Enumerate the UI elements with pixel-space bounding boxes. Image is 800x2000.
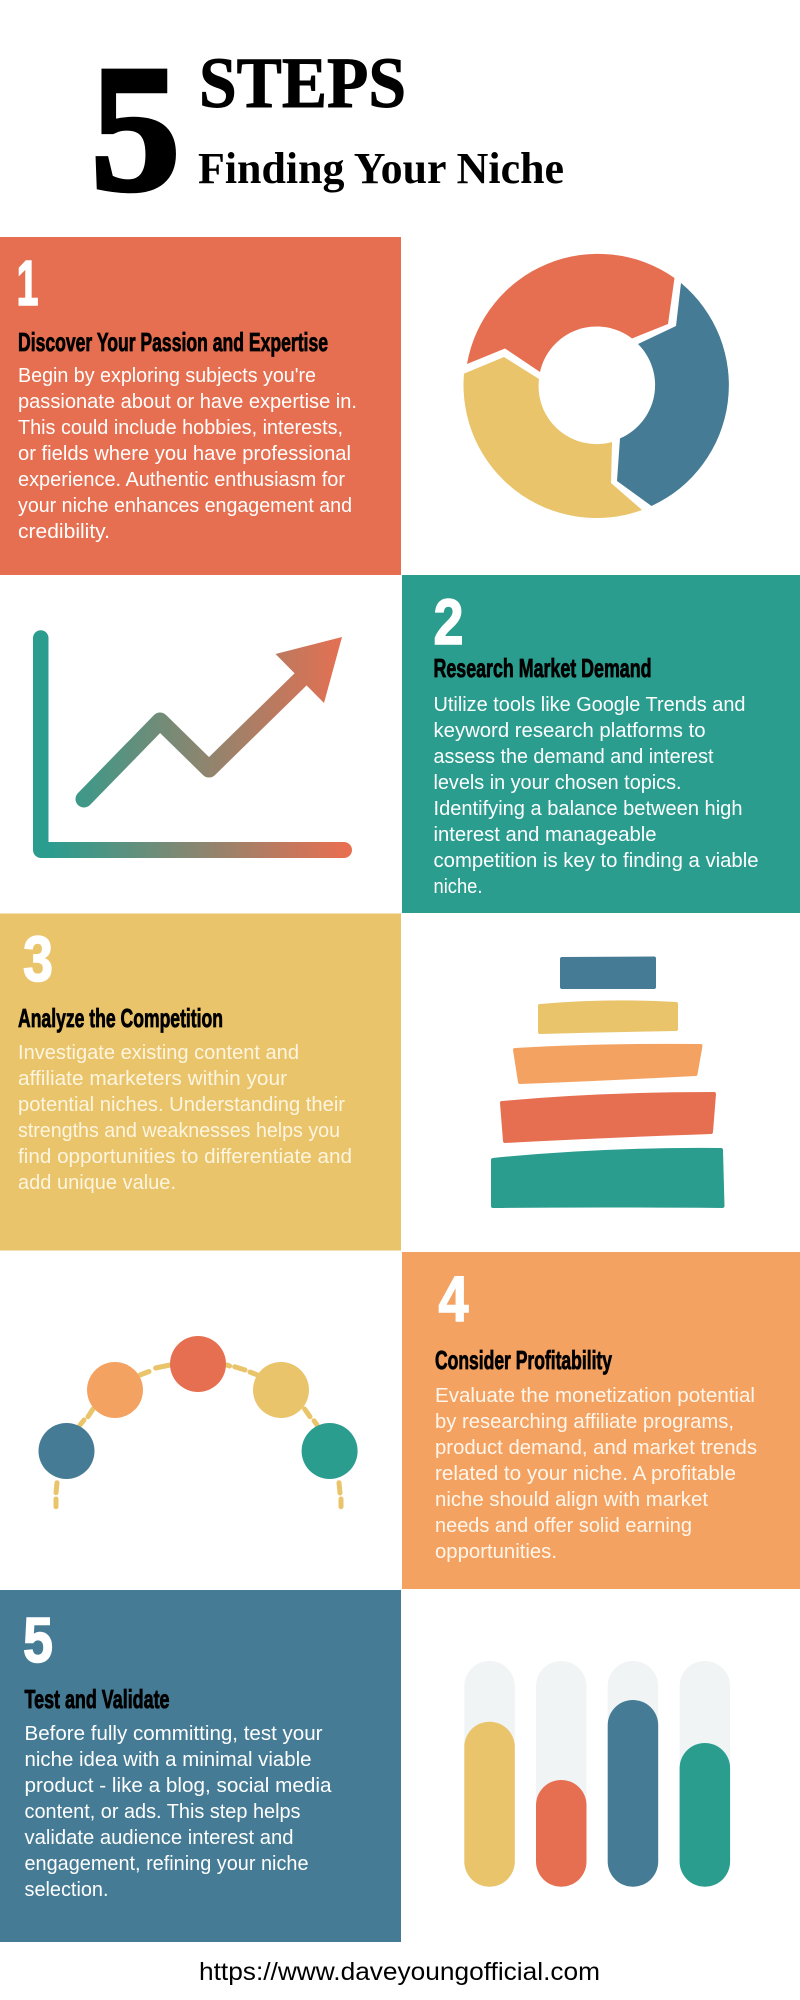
body text: step 5: niche idea with a minimal viable — [24, 1748, 312, 1771]
body text: step 4: product demand, and market trends — [435, 1436, 757, 1459]
heading: step 3: Analyze the Competition — [18, 1003, 223, 1033]
footer url: https://www.daveyoungofficial.com — [199, 1958, 600, 1986]
panel: step 1 discover passion — [0, 237, 401, 575]
body text: step 2: Identifying a balance between high — [434, 797, 742, 820]
body text: step 2: keyword research platforms to — [434, 719, 706, 742]
title — [91, 29, 564, 228]
subtitle: Finding Your Niche — [198, 144, 564, 193]
body text: step 1: your niche enhances engagement and — [18, 494, 352, 517]
body text: step 4 — [435, 1384, 757, 1563]
chart: vertical pill bars — [464, 1661, 730, 1887]
body text: step 1: or fields where you have professional — [18, 442, 351, 465]
body text: step 2: assess the demand and interest — [434, 745, 714, 768]
body text: step 1 — [18, 364, 357, 543]
icon: connected dots arc — [38, 1336, 358, 1507]
body text: step 1: passionate about or have expertise in. — [18, 390, 357, 413]
body text: step 3: potential niches. Understanding their — [18, 1093, 345, 1116]
panel: step 2 market demand — [402, 575, 800, 913]
body text: step 5: content, or ads. This step helps — [24, 1800, 300, 1823]
body text: step 3: affiliate marketers within your — [18, 1067, 287, 1090]
body text: step 4: Evaluate the monetization potential — [435, 1384, 755, 1407]
icon: stacked pyramid — [493, 958, 722, 1206]
body text: step 2 — [434, 693, 758, 898]
body text: step 3: find opportunities to differentiate and — [18, 1145, 352, 1168]
body text: step 4: niche should align with market — [435, 1488, 708, 1511]
body text: step 3: Investigate existing content and — [18, 1041, 299, 1064]
step number 4: 4 — [438, 1263, 469, 1335]
panel: step 4 profitability — [402, 1252, 800, 1589]
body text: step 1: credibility. — [18, 520, 110, 543]
body text: step 1: experience. Authentic enthusiasm for — [18, 468, 345, 491]
body text: step 3: add unique value. — [18, 1171, 176, 1194]
body text: step 2: levels in your chosen topics. — [434, 771, 682, 794]
icon: cycle donut chart — [464, 254, 729, 518]
body text: step 4: by researching affiliate programs, — [435, 1410, 734, 1433]
heading: step 4: Consider Profitability — [435, 1345, 612, 1375]
body text: step 1: This could include hobbies, interests, — [18, 416, 343, 439]
icon: growth line chart with arrow — [33, 630, 352, 858]
body text: step 4: needs and offer solid earning — [435, 1514, 692, 1537]
body text: step 5: engagement, refining your niche — [24, 1852, 308, 1875]
body text: step 3 — [18, 1041, 352, 1194]
body text: step 5 — [24, 1722, 332, 1901]
step number 1: 1 — [16, 247, 38, 319]
body text: step 5: product - like a blog, social media — [24, 1774, 332, 1797]
body text: step 2: interest and manageable — [434, 823, 656, 846]
step number 3: 3 — [23, 923, 53, 995]
body text: step 5: validate audience interest and — [24, 1826, 294, 1849]
body text: step 2: Utilize tools like Google Trends and — [434, 693, 746, 716]
body text: step 1: Begin by exploring subjects you're — [18, 364, 316, 387]
big numeral 5: 5 — [91, 29, 180, 228]
heading: step 1: Discover Your Passion and Expertise — [18, 327, 328, 357]
step number 2: 2 — [434, 586, 464, 658]
step number 5: 5 — [23, 1604, 53, 1676]
body text: step 5: Before fully committing, test your — [24, 1722, 323, 1745]
panel: step 5 test and validate — [0, 1590, 401, 1942]
body text: step 2: niche. — [434, 875, 482, 898]
heading: step 5: Test and Validate — [24, 1684, 170, 1714]
body text: step 4: related to your niche. A profitable — [435, 1462, 736, 1485]
heading: step 2: Research Market Demand — [434, 653, 652, 683]
body text: step 5: selection. — [24, 1878, 108, 1901]
panel: step 3 competition — [0, 914, 401, 1250]
body text: step 4: opportunities. — [435, 1540, 557, 1563]
title: STEPS: STEPS — [199, 43, 406, 123]
body text: step 2: competition is key to finding a viable — [434, 849, 758, 872]
body text: step 3: strengths and weaknesses helps you — [18, 1119, 340, 1142]
